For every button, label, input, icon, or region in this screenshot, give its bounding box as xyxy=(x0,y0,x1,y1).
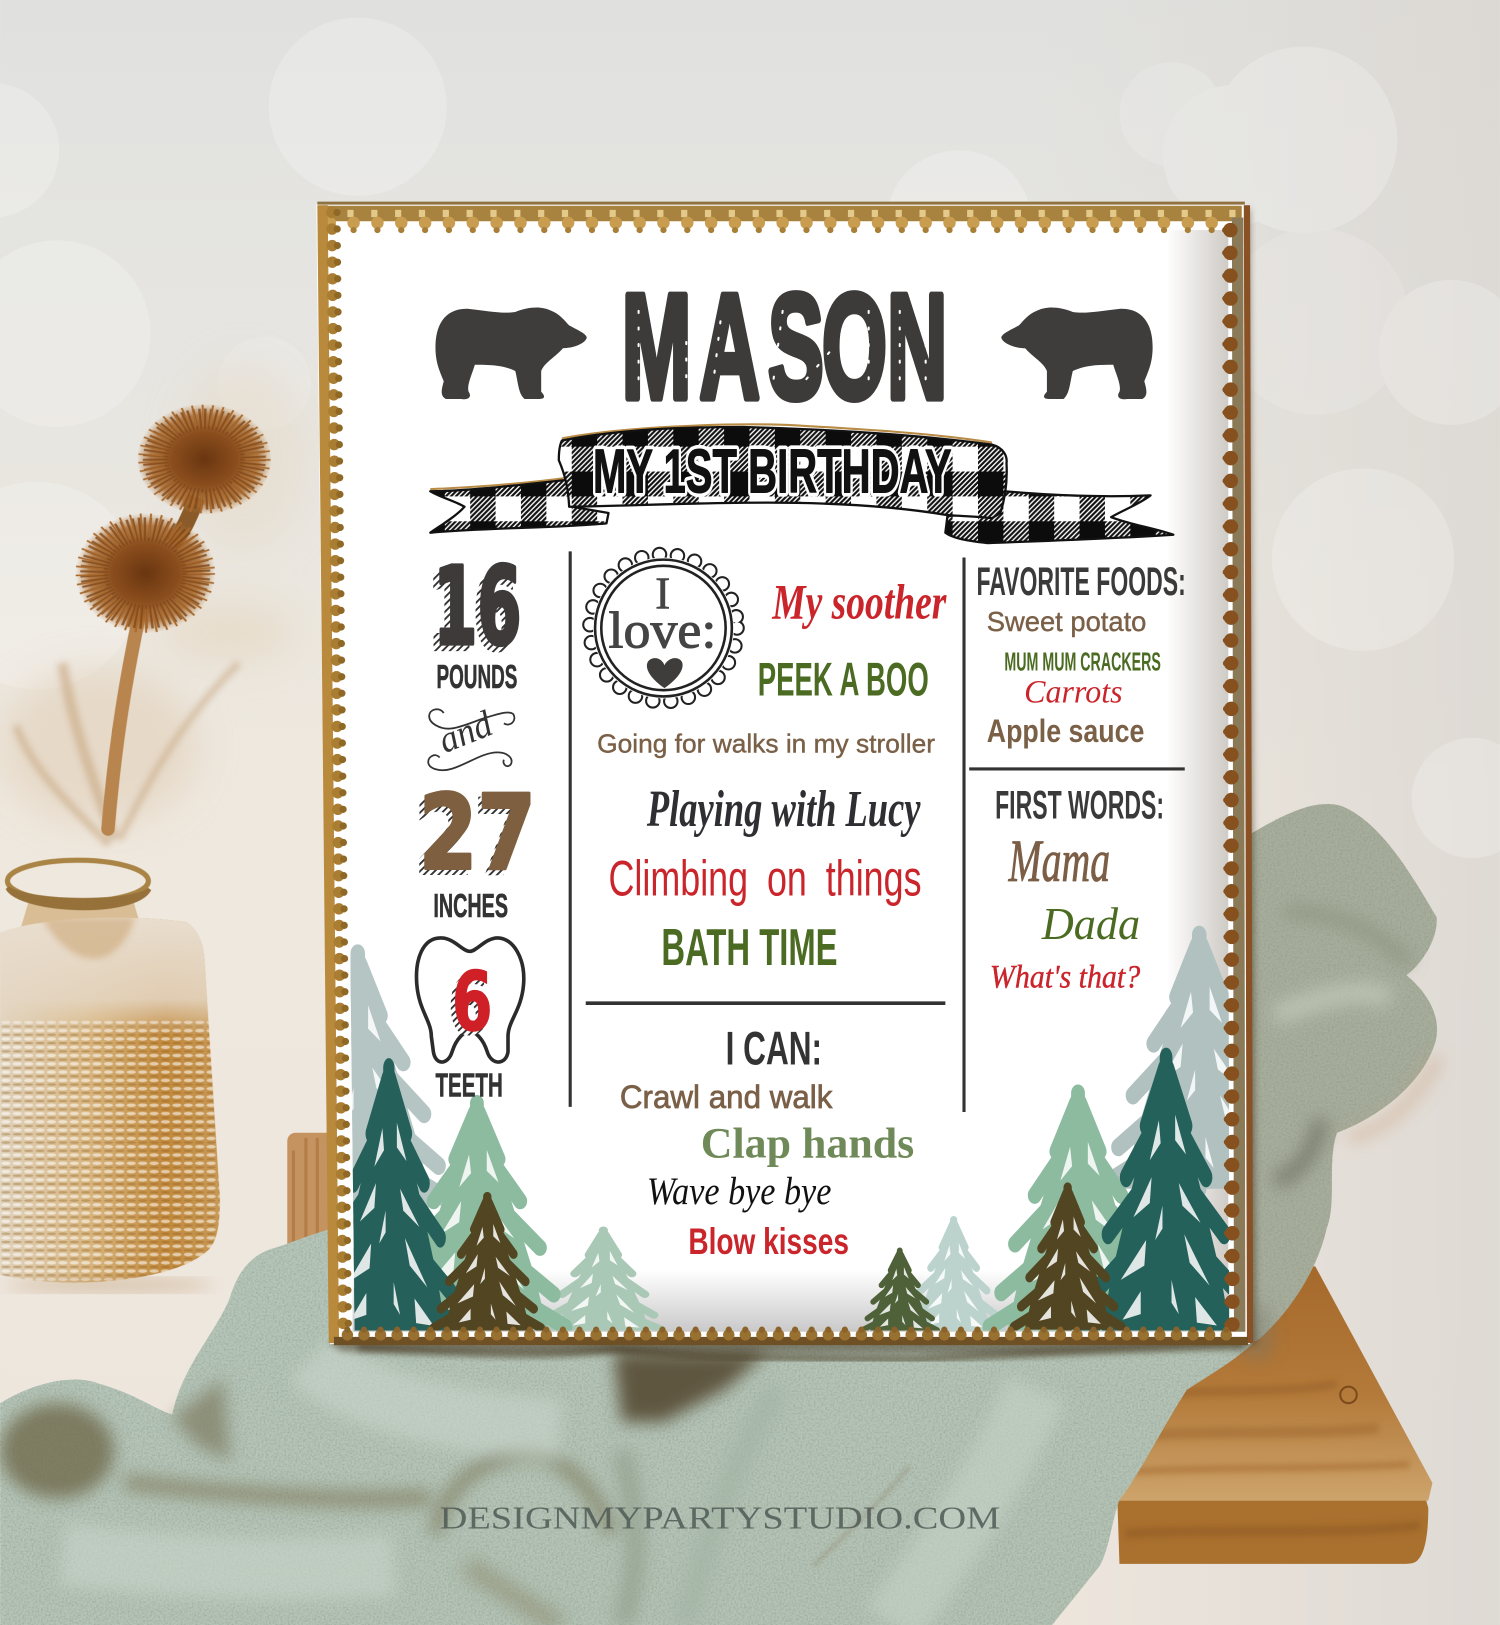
frame right xyxy=(1247,205,1250,1343)
list: I can: Clap hands xyxy=(701,1120,914,1168)
list: favorite foods: FAVORITE FOODS: xyxy=(976,560,1186,604)
center band xyxy=(559,427,1007,518)
list: I love xyxy=(597,575,947,976)
list: first words: What's that? xyxy=(990,959,1141,996)
frame bottom xyxy=(334,1337,1248,1345)
list: I can: I CAN: xyxy=(726,1022,822,1075)
bokeh lights xyxy=(0,18,1500,858)
list: first words: Mama xyxy=(1008,828,1110,895)
list: I can: Blow kisses xyxy=(688,1220,849,1262)
list: I can xyxy=(620,1022,914,1262)
panel: pine forest xyxy=(264,935,1293,1337)
and flourish: and xyxy=(433,703,498,762)
banner text: MY 1ST BIRTHDAY xyxy=(593,437,952,506)
board top face xyxy=(1037,1266,1432,1501)
dried flowers xyxy=(76,404,272,829)
list: I love: Going for walks in my stroller xyxy=(597,730,935,758)
plaid banner xyxy=(430,424,1173,543)
tree: small olive xyxy=(862,1250,937,1332)
right bundled cloth xyxy=(1249,804,1437,1344)
tree: mid green left xyxy=(426,1095,572,1330)
cloth shadows xyxy=(0,1306,1264,1625)
panel: height: INCHES xyxy=(433,888,508,925)
list: favorite foods: Apple sauce xyxy=(987,713,1144,749)
panel: weight: 16 xyxy=(433,546,521,670)
seed head upper xyxy=(137,404,272,514)
icon: I love badge: love: xyxy=(609,603,716,660)
tree: brown right xyxy=(1014,1187,1121,1330)
frame top xyxy=(317,202,1245,205)
banner text xyxy=(593,437,952,506)
banner text: MY 1ST BIRTHDAY xyxy=(593,437,952,506)
panel: teeth xyxy=(417,938,524,1104)
icon: right bear xyxy=(1001,307,1153,399)
list: favorite foods xyxy=(976,560,1186,749)
list: I love: Playing with Lucy xyxy=(646,781,921,838)
list: I love: BATH TIME xyxy=(661,918,838,976)
wooden board xyxy=(287,1133,1432,1564)
list: favorite foods: MUM MUM CRACKERS xyxy=(1004,649,1161,677)
list: I love: My soother xyxy=(772,575,947,630)
panel: weight xyxy=(427,546,521,696)
tree: grey left xyxy=(350,944,446,1214)
dividers xyxy=(570,551,1185,1112)
green cloth xyxy=(0,804,1439,1625)
tree: grey right xyxy=(1111,926,1229,1194)
banner edge glow xyxy=(430,424,992,489)
pampas grass xyxy=(0,363,306,845)
list: first words: Dada xyxy=(1041,898,1140,949)
panel: height: 27 xyxy=(419,773,536,893)
frame left xyxy=(323,205,334,1343)
tree: dark teal right xyxy=(1084,1058,1248,1337)
list: first words: FIRST WORDS: xyxy=(995,784,1164,828)
glass vase xyxy=(0,860,223,1292)
list: I can: Crawl and walk xyxy=(620,1079,833,1115)
panel: teeth: 6 xyxy=(452,956,492,1050)
icon: I love badge xyxy=(590,554,737,702)
ornate gold frame xyxy=(317,203,1250,1343)
frame shadow xyxy=(330,207,1256,1353)
list: first words xyxy=(990,784,1164,996)
panel: weight: 16 xyxy=(427,551,518,675)
panel: weight: POUNDS xyxy=(437,659,517,696)
icon: left bear xyxy=(435,307,587,399)
left ribbon tail xyxy=(430,480,609,533)
tree: pale left xyxy=(545,1230,662,1332)
list: favorite foods: Sweet potato xyxy=(987,606,1146,637)
list: I can: Wave bye bye xyxy=(647,1169,831,1213)
seed head lower xyxy=(76,513,215,633)
tree: dark teal left xyxy=(352,1058,459,1331)
panel: teeth: 6 xyxy=(447,960,490,1054)
list: I love: PEEK A BOO xyxy=(758,653,929,706)
main cloth xyxy=(0,1223,1254,1625)
tree: mid green right xyxy=(982,1084,1128,1330)
icon: tooth xyxy=(417,938,524,1062)
and flourish xyxy=(428,703,514,770)
list: I love: Climbing on things xyxy=(609,850,922,906)
panel: height xyxy=(414,773,536,925)
tree: pale right xyxy=(907,1220,1000,1332)
shadow beneath frame xyxy=(358,1345,1244,1360)
panel: teeth: TEETH xyxy=(435,1067,503,1104)
list: favorite foods: Carrots xyxy=(1024,674,1123,711)
paper sheet xyxy=(316,204,1250,1344)
board front face xyxy=(1117,1501,1428,1564)
icon: I love badge: I xyxy=(655,567,670,618)
panel: height: 27 xyxy=(414,779,534,899)
watermark: DESIGNMYPARTYSTUDIO.COM xyxy=(440,1500,1000,1536)
tree: brown left xyxy=(434,1197,541,1331)
title: MASON xyxy=(622,263,947,430)
right ribbon tail xyxy=(945,491,1173,543)
